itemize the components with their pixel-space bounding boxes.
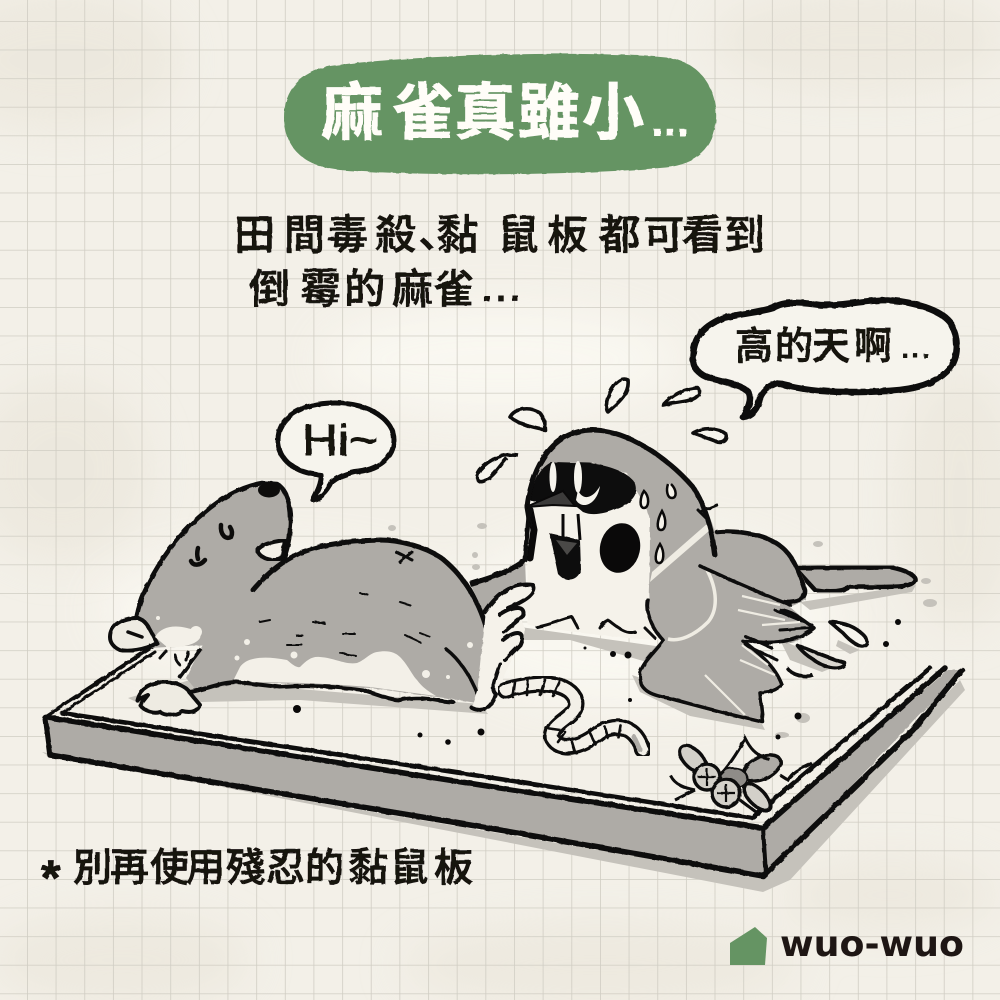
fly eyes — [694, 764, 720, 790]
glue specks — [293, 523, 937, 745]
rat eyes — [191, 525, 232, 565]
title banner — [284, 54, 716, 174]
feather highlights — [705, 596, 800, 715]
footer note: 別再使用殘忍的黏鼠板 — [73, 837, 473, 893]
rat nose — [258, 482, 280, 498]
intro text: 田間毒殺、黏鼠板都可看到 — [234, 201, 765, 271]
logo house icon — [730, 927, 767, 965]
intro text: ... — [482, 271, 520, 309]
sparrow chin — [530, 510, 534, 558]
sparrow mouth — [549, 533, 581, 580]
shadows on board — [128, 585, 916, 730]
speech bubble: Hi — [278, 403, 394, 500]
title text: 麻雀真雖小 — [321, 62, 644, 152]
title ellipsis: ... — [651, 94, 689, 147]
sparrow throat lines — [563, 514, 580, 540]
sparrow collar — [650, 523, 710, 582]
board front and side faces — [46, 670, 963, 876]
sparrow wing highlight — [668, 568, 715, 640]
bubble ellipsis: ... — [901, 332, 930, 365]
sparrow outlines — [527, 430, 814, 722]
sparrow eyes — [550, 461, 600, 505]
board rim outlines — [45, 645, 962, 876]
sparrow white face and belly — [527, 490, 665, 640]
rat hand — [137, 682, 200, 715]
sparrow — [526, 430, 915, 722]
speech bubble: oh my god — [693, 300, 957, 417]
footer note: * — [41, 850, 61, 906]
rat on its back — [110, 482, 488, 715]
glue board — [42, 645, 965, 892]
sparrow cheek patch — [595, 519, 645, 577]
rat ear — [110, 618, 157, 651]
rat belly — [232, 651, 436, 696]
sparrow sweat drops — [641, 484, 676, 563]
bubble text: 高的天啊 — [735, 315, 892, 370]
logo wordmark: wuo-wuo — [780, 924, 964, 965]
sparrow gray body — [531, 430, 814, 720]
sparrow black mask — [530, 462, 636, 514]
dead fly — [670, 738, 812, 815]
small feathered wing near rat — [470, 505, 534, 710]
sparrow tail — [795, 567, 915, 591]
bubble text: Hi: Hi~ — [302, 416, 378, 465]
rat fur dots — [156, 616, 473, 679]
intro text — [234, 201, 765, 315]
sparrow beak — [526, 491, 575, 507]
worm — [505, 680, 643, 752]
intro text: 倒霉的麻雀 — [249, 255, 474, 315]
rat outlines — [137, 483, 488, 702]
rat mouth — [257, 540, 285, 560]
fly body — [719, 768, 747, 788]
board shadow — [42, 680, 965, 892]
fly wings — [675, 741, 775, 815]
rat ear mark — [128, 632, 142, 637]
fly legs — [670, 738, 812, 815]
sparrow tongue — [556, 540, 577, 555]
sweat drops — [477, 379, 867, 676]
rat throat patch — [155, 626, 200, 647]
logo — [730, 924, 964, 965]
rat body — [137, 483, 486, 703]
